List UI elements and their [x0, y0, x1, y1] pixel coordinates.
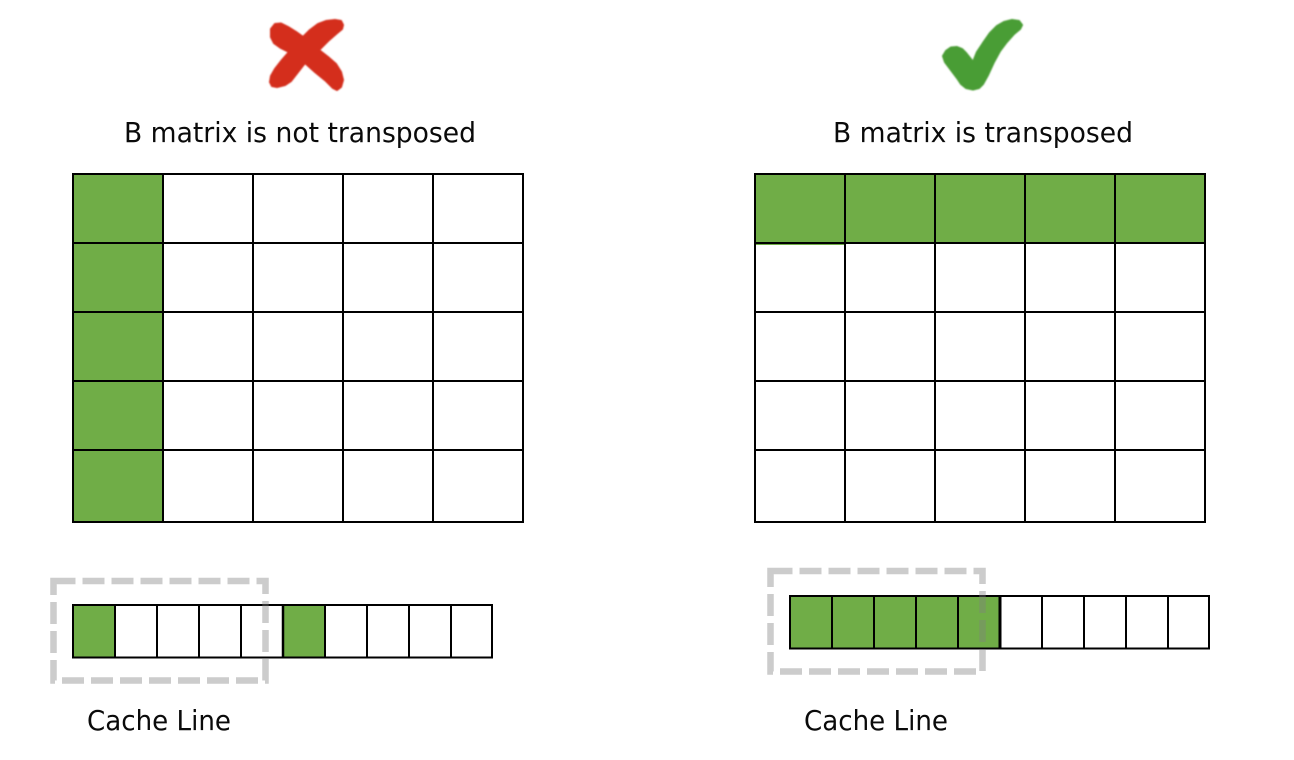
cache line outline: [54, 581, 266, 680]
icon: green check: [943, 20, 1022, 90]
panel: not transposed: [54, 20, 523, 737]
cache row: scattered elements: [73, 605, 492, 658]
panel: transposed: [755, 20, 1209, 737]
heading: transposed: B matrix is transposed: [833, 116, 1133, 149]
matrix grid: green first column: [73, 174, 523, 522]
label: cache line: Cache Line: [804, 704, 948, 737]
icon: red cross: [270, 20, 343, 90]
matrix grid: green first row: [755, 174, 1205, 522]
cache line outline: [770, 571, 982, 672]
label: cache line: Cache Line: [87, 704, 231, 737]
heading: not transposed: B matrix is not transposed: [124, 116, 476, 149]
cache row: contiguous elements: [790, 596, 1209, 648]
